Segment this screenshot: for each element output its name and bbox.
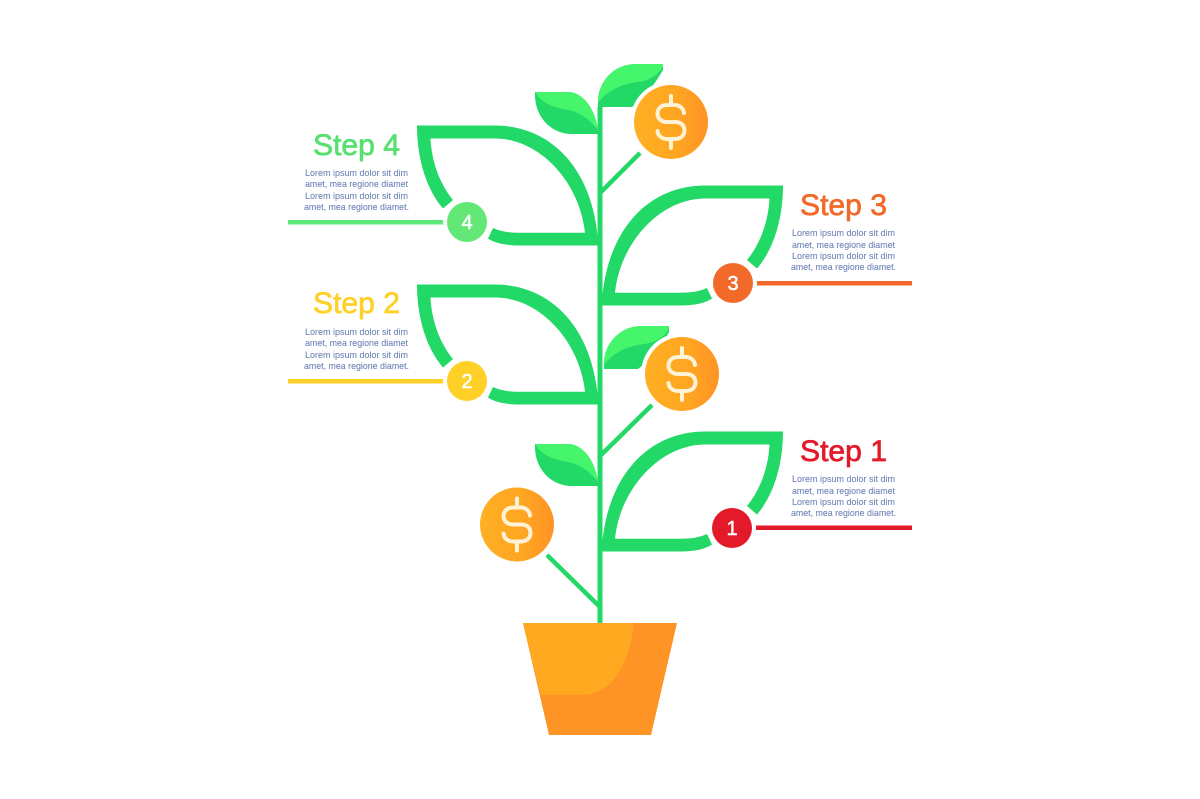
step 3 text block: Step 3 xyxy=(800,189,887,222)
step 3 marker and line: 3 xyxy=(727,273,739,295)
step 3 marker and line xyxy=(709,259,912,307)
small leaf: top right xyxy=(598,64,663,107)
step 2 text block: amet, mea regione diamet xyxy=(305,338,408,349)
step 3 leaf outline xyxy=(602,186,783,306)
step 2 text block: amet, mea regione diamet. xyxy=(304,361,409,372)
step 3 text block: Lorem ipsum dolor sit dim xyxy=(792,228,895,239)
step 2 leaf outline xyxy=(417,284,598,404)
step 1 leaf outline xyxy=(602,432,783,552)
step 3 text block xyxy=(791,189,896,273)
branch to lower coin xyxy=(547,555,600,607)
step 4 text block xyxy=(304,129,409,213)
step 2 marker and line xyxy=(288,357,491,405)
small leaf: top left xyxy=(535,92,598,134)
branch to middle coin xyxy=(600,405,652,456)
step 2 text block: Lorem ipsum dolor sit dim xyxy=(305,327,408,338)
step 1 marker and line xyxy=(708,504,912,552)
step 4 text block: Step 4 xyxy=(313,129,400,162)
small leaf: middle right xyxy=(604,326,669,369)
step 1 marker and line: 1 xyxy=(726,518,738,540)
flower pot xyxy=(523,623,677,735)
step 1 text block xyxy=(791,435,896,519)
icon: dollar coin middle xyxy=(641,333,723,415)
step 2 text block: Step 2 xyxy=(313,287,400,320)
step 4 text block: amet, mea regione diamet xyxy=(305,179,408,190)
step 4 text block: amet, mea regione diamet. xyxy=(304,202,409,213)
branch to top coin xyxy=(600,153,640,193)
step 1 text block: Step 1 xyxy=(800,435,887,468)
plant stem xyxy=(598,107,602,623)
step 4 marker and line: 4 xyxy=(461,212,473,234)
step 1 text block: Lorem ipsum dolor sit dim xyxy=(792,474,895,485)
step 1 text block: amet, mea regione diamet. xyxy=(791,508,896,519)
step 1 text block: Lorem ipsum dolor sit dim xyxy=(792,497,895,508)
step 4 marker and line xyxy=(288,198,491,246)
step 1 text block: amet, mea regione diamet xyxy=(792,486,895,497)
step 2 marker and line: 2 xyxy=(461,371,473,393)
step 2 text block xyxy=(304,287,409,372)
icon: dollar coin lower xyxy=(480,488,554,562)
step 3 text block: amet, mea regione diamet. xyxy=(791,262,896,273)
step 3 text block: Lorem ipsum dolor sit dim xyxy=(792,251,895,262)
step 2 text block: Lorem ipsum dolor sit dim xyxy=(305,350,408,361)
step 4 leaf outline xyxy=(417,126,598,246)
icon: dollar coin top xyxy=(630,81,712,163)
step 3 text block: amet, mea regione diamet xyxy=(792,240,895,251)
step 4 text block: Lorem ipsum dolor sit dim xyxy=(305,168,408,179)
step 4 text block: Lorem ipsum dolor sit dim xyxy=(305,191,408,202)
small leaf: lower left xyxy=(535,444,598,486)
